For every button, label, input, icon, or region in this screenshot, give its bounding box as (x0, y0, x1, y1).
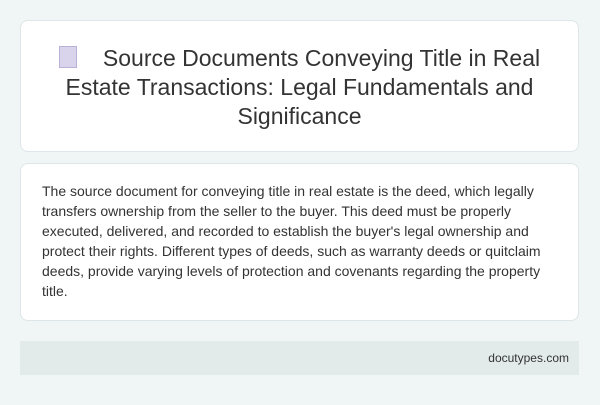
panel: title (20, 20, 579, 152)
footer (20, 341, 579, 375)
title: Source Documents Conveying Title in Real Estate Transactions: Legal Fundamentals and Significance (66, 45, 540, 129)
icon: document (59, 46, 77, 68)
panel: description (20, 163, 579, 321)
footer text: docutypes.com (488, 351, 569, 365)
text block: The source document for conveying title in real estate is the deed, which legally transfers ownership from the seller to the buyer. This deed must be properly executed, delivered, and recorded to establish the buyer's legal ownership and protect their rights. Different types of deeds, such as warranty deeds or quitclaim deeds, provide varying levels of protection and covenants regarding the property title. (42, 183, 541, 299)
